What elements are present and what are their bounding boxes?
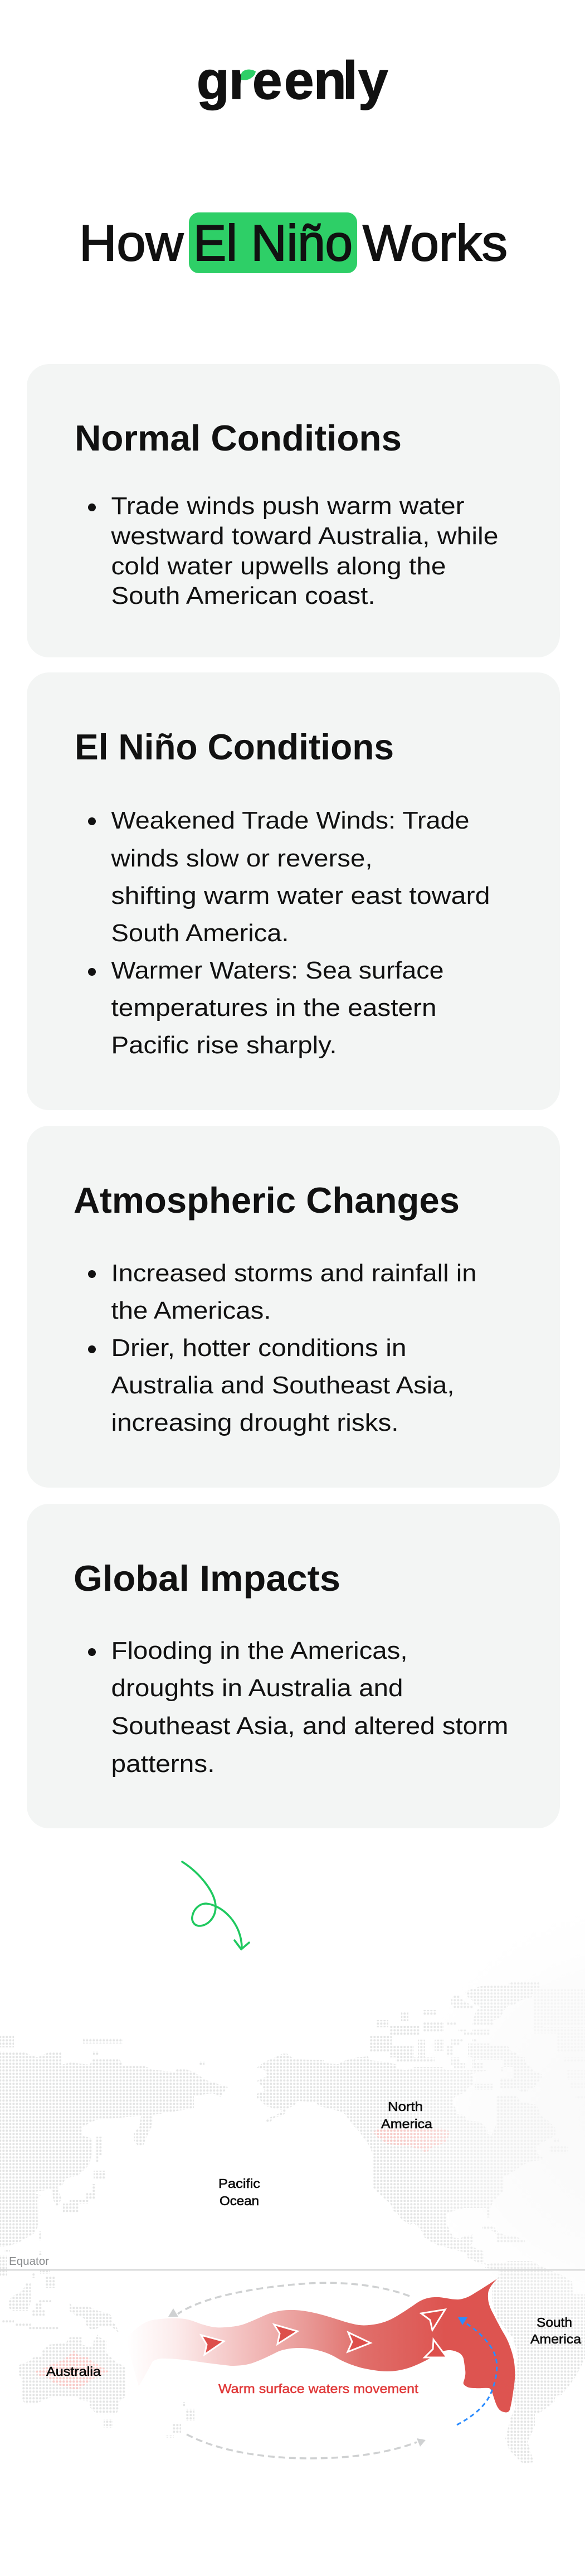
list: global impacts: patterns. (111, 1750, 215, 1778)
map: background haze (390, 1885, 585, 2353)
label: pacific ocean: Pacific (218, 2176, 260, 2191)
label: south america: America (530, 2332, 582, 2346)
list: global impacts (88, 1637, 508, 1778)
map: south america dots (485, 2261, 585, 2463)
list: global impacts: droughts in Australia and (111, 1674, 403, 1702)
panel: global impacts (27, 1504, 560, 1828)
map: north america warm zone dots (373, 2128, 450, 2153)
list: atmospheric changes: Australia and Southeast Asia, (111, 1372, 455, 1399)
label: pacific ocean (218, 2176, 260, 2208)
map: dotted world map (0, 1885, 585, 2463)
map: north america dots (257, 2054, 555, 2265)
list: atmospheric changes: Increased storms and rainfall in (111, 1260, 477, 1287)
list: atmospheric changes: increasing drought risks. (111, 1409, 399, 1436)
title: El Niño (193, 215, 353, 272)
list: el nino conditions: Weakened Trade Winds: Trade (111, 807, 469, 834)
map: caribbean dots (482, 2226, 525, 2243)
list: el nino conditions: shifting warm water east toward (111, 882, 490, 909)
arrow: blue dashed upwelling (457, 2317, 497, 2425)
map: arctic islands and greenland dots (369, 1982, 568, 2153)
list: el nino conditions: Pacific rise sharply. (111, 1032, 337, 1059)
label: pacific ocean: Ocean (220, 2194, 259, 2208)
arrow: upper gray dashed current (168, 2283, 410, 2317)
map: asia and north asia dots (0, 2035, 228, 2247)
label: north america (381, 2099, 433, 2131)
list: normal conditions: Trade winds push warm water (111, 492, 464, 520)
map: australia dots (18, 2335, 194, 2438)
panel: normal conditions (27, 364, 560, 657)
label: south america (530, 2315, 582, 2346)
title highlight (189, 212, 357, 273)
list: atmospheric changes: the Americas. (111, 1297, 271, 1324)
list: global impacts: Southeast Asia, and altered storm (111, 1712, 508, 1740)
title: Works (363, 215, 508, 272)
panel: el nino conditions (27, 672, 560, 1110)
label: australia: Australia (46, 2364, 101, 2379)
warm water ribbon (126, 2279, 515, 2413)
list: el nino conditions: Warmer Waters: Sea surface (111, 957, 443, 984)
list: global impacts: Flooding in the Americas, (111, 1637, 408, 1664)
heading: atmospheric changes: Atmospheric Changes (74, 1180, 460, 1221)
icon: green curly arrow (182, 1862, 249, 1949)
logo: greenly: greenly (197, 51, 388, 110)
arrowhead 3 (348, 2332, 370, 2352)
list: el nino conditions: South America. (111, 919, 289, 947)
arrowhead 4 (421, 2309, 445, 2330)
title: How (79, 215, 183, 272)
list: normal conditions: westward toward Australia, while (110, 522, 498, 550)
map: australia warm zone dots (35, 2351, 109, 2389)
map: europe faint dots (533, 1989, 585, 2099)
list: el nino conditions: temperatures in the eastern (111, 994, 437, 1021)
panel: atmospheric changes (27, 1126, 560, 1488)
list: el nino conditions (88, 807, 490, 1059)
list: atmospheric changes (88, 1260, 477, 1436)
label: north america: America (381, 2117, 433, 2131)
list: atmospheric changes: Drier, hotter conditions in (111, 1334, 407, 1362)
title (79, 212, 508, 273)
heading: normal conditions: Normal Conditions (75, 418, 402, 458)
arrowhead 5 (425, 2340, 447, 2357)
arrowhead 1 (201, 2335, 224, 2355)
list: normal conditions: cold water upwells along the (111, 553, 446, 580)
heading: el nino conditions: El Niño Conditions (75, 727, 394, 767)
heading: global impacts: Global Impacts (74, 1558, 340, 1599)
label: warm surface waters movement: Warm surface waters movement (218, 2381, 419, 2396)
label: north america: North (388, 2099, 423, 2114)
equator line (0, 2269, 585, 2270)
arrow: lower gray dashed current (187, 2434, 426, 2458)
label: equator: Equator (9, 2255, 49, 2268)
list: normal conditions: South American coast. (111, 582, 376, 609)
list: normal conditions (88, 492, 498, 609)
arrowhead 2 (274, 2325, 298, 2344)
list: el nino conditions: winds slow or reverse, (110, 845, 373, 872)
map: japan, kamchatka and island dots (0, 2116, 153, 2332)
warm current arrowheads (201, 2309, 447, 2357)
label: south america: South (537, 2315, 572, 2330)
